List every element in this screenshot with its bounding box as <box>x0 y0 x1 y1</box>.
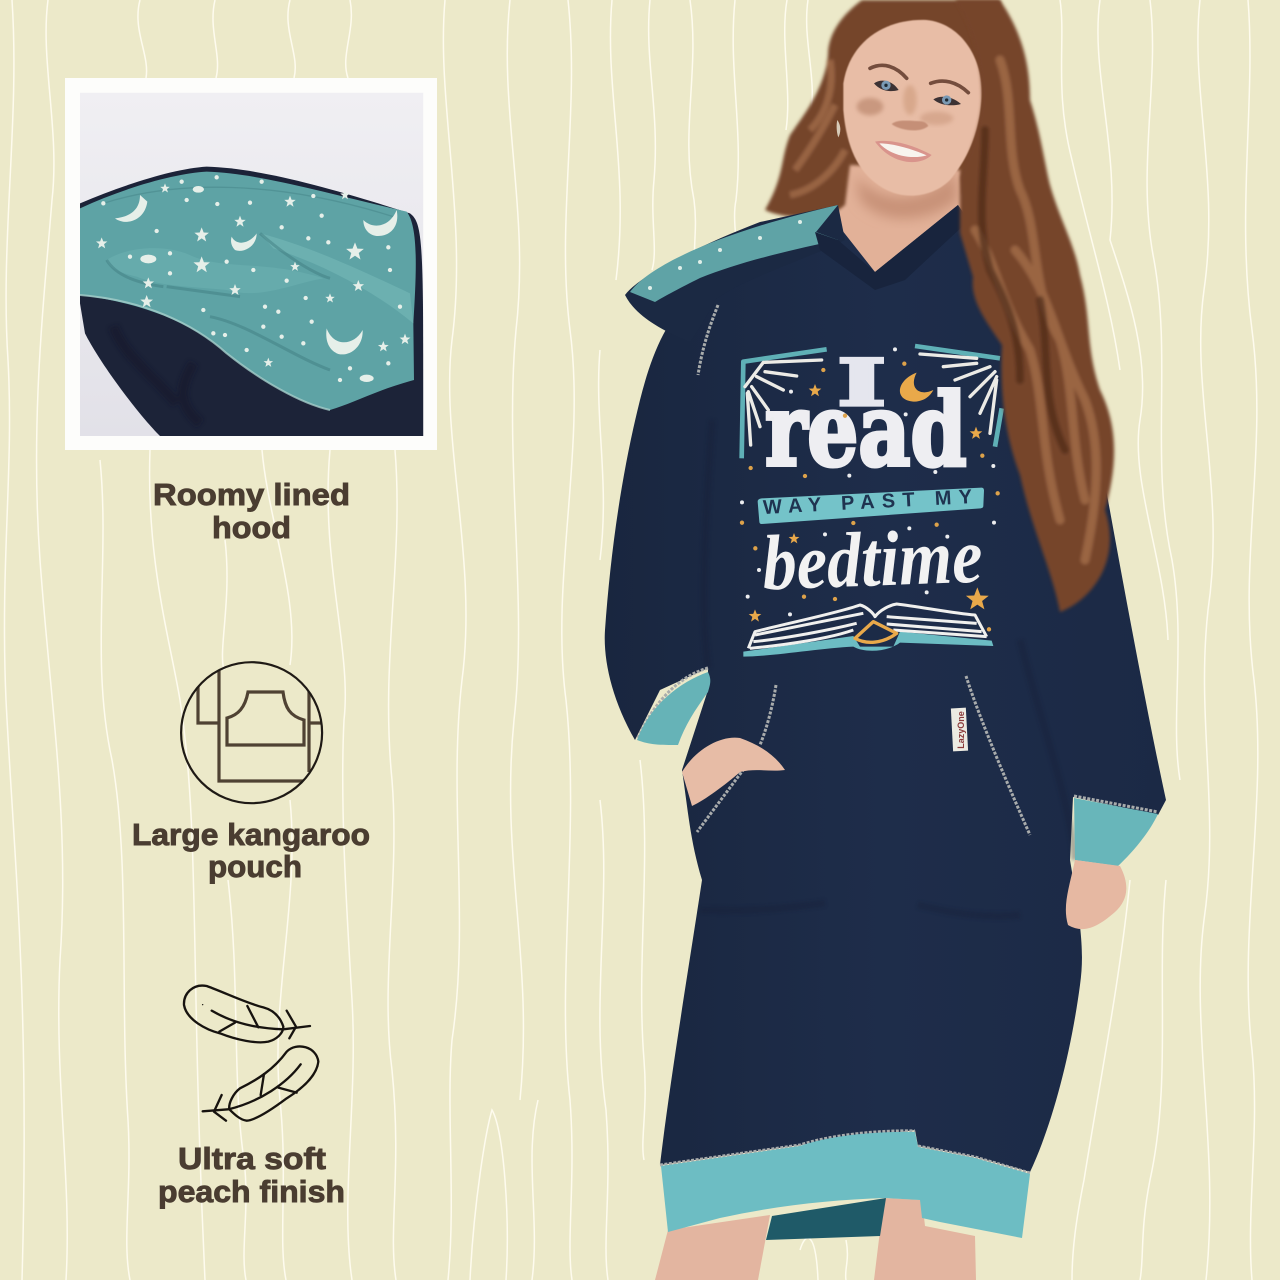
hood lining <box>630 205 838 302</box>
label: large kangaroo pouch: pouch <box>208 849 302 884</box>
label: ultra soft peach finish: Ultra soft <box>178 1141 326 1176</box>
brand tag <box>951 708 968 751</box>
sun rays <box>745 354 997 445</box>
panel: hood inset photo <box>65 78 437 450</box>
label: large kangaroo pouch: Large kangaroo <box>132 817 370 852</box>
inset white frame <box>65 78 437 450</box>
neck <box>800 165 965 275</box>
hem band <box>661 1132 1030 1238</box>
hoodie print graphic <box>742 346 1002 657</box>
teal frame corners <box>742 346 1002 458</box>
photo: lined hood <box>80 93 423 436</box>
sleeve cuff left <box>637 672 710 745</box>
open book <box>743 604 993 657</box>
label: roomy lined hood: hood <box>212 510 291 545</box>
icon: kangaroo pouch <box>181 660 325 803</box>
stitching <box>638 305 1158 1173</box>
hand right <box>1066 860 1126 929</box>
brand tag: LazyOne <box>956 711 966 749</box>
face <box>837 20 982 196</box>
hoodie print graphic: read <box>765 371 967 489</box>
legs <box>655 1198 976 1280</box>
label: large kangaroo pouch <box>132 817 370 884</box>
label: ultra soft peach finish: peach finish <box>158 1174 345 1209</box>
heading: I read: I <box>837 346 886 420</box>
label: ultra soft peach finish <box>158 1141 345 1209</box>
label: roomy lined hood <box>153 477 350 545</box>
hood <box>625 205 845 342</box>
hoodie body <box>605 205 1166 1172</box>
hair: long right side <box>955 0 1114 612</box>
icon: feathers <box>184 986 318 1121</box>
sleeve cuff right <box>1074 798 1158 866</box>
print dots <box>742 349 994 614</box>
script: bedtime: bedtime <box>761 512 984 606</box>
stars <box>749 384 989 622</box>
model wearing hoodie dress <box>605 0 1166 1280</box>
hoodie shading <box>700 420 1075 916</box>
dress inner back hem <box>766 1198 886 1240</box>
label: roomy lined hood: Roomy lined <box>153 477 350 512</box>
hand in pocket <box>682 738 785 806</box>
hair: top and left <box>765 0 1000 217</box>
hoodie collar <box>815 205 964 290</box>
moon <box>900 373 933 402</box>
banner: way past my: WAY PAST MY <box>762 486 973 519</box>
